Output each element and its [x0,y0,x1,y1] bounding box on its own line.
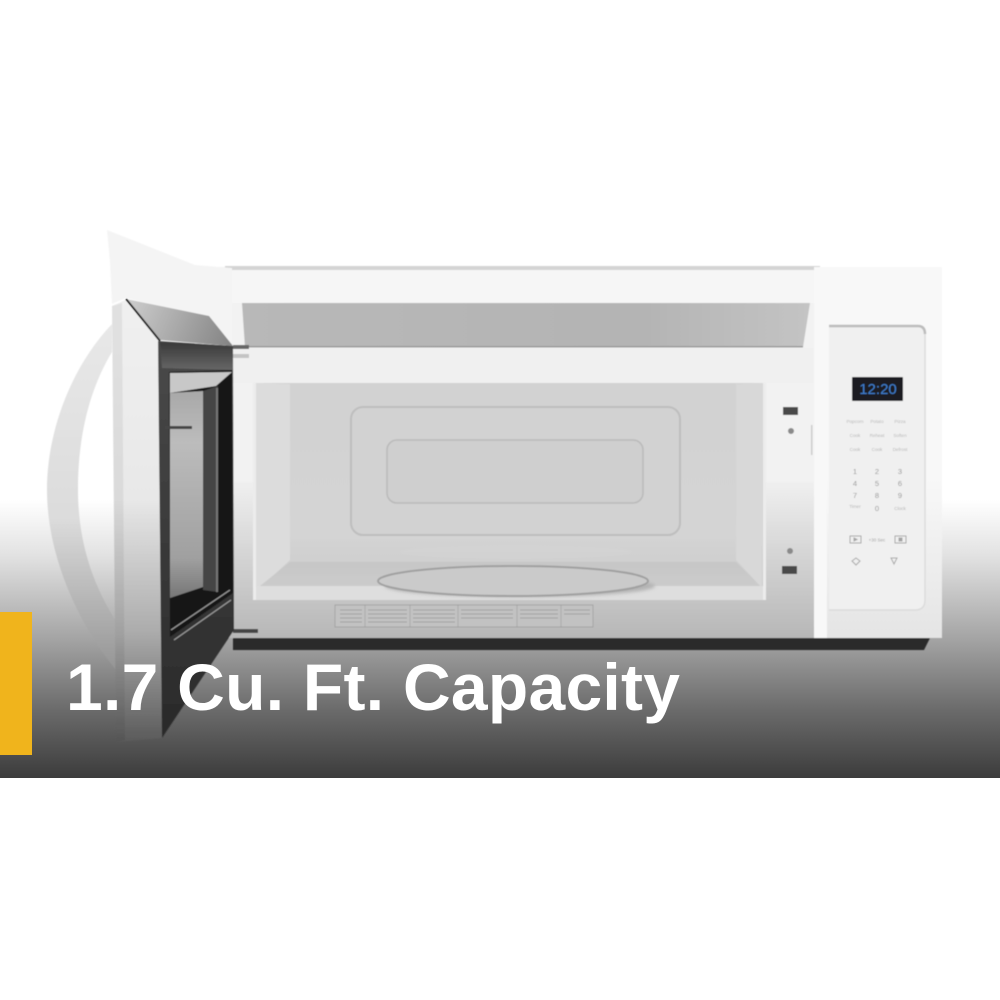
control panel housing [827,267,942,638]
number keys: 9 [898,491,902,500]
recess right and bottom edge [829,334,925,610]
door top face [126,299,233,346]
number keys: Clock [894,506,906,511]
icon: door handle [47,324,118,672]
number keys: 8 [875,491,879,500]
function keys: Cook [850,447,861,452]
upper vent recess [232,270,814,383]
door side edge [112,300,162,742]
body upper fill [195,267,827,482]
top-left hinge flap [107,230,232,345]
function keys: Cook [872,447,883,452]
number keys [849,467,906,513]
turntable reflection [400,545,632,559]
function keys: Reheat [870,433,885,438]
dark bottom edge [233,638,930,650]
divider strip [814,267,827,638]
microwave oven [47,230,942,742]
function keys: Popcorn [846,419,864,424]
function keys: Soften [893,433,907,438]
number keys: 0 [875,504,879,513]
number keys: 2 [875,467,879,476]
number keys: 5 [875,479,879,488]
number keys: 1 [853,467,857,476]
function keys [846,419,908,452]
number keys: 6 [898,479,902,488]
door inner frame [158,341,234,738]
number keys: Timer [849,504,861,509]
door latch slots [782,407,812,574]
function keys: Pizza [894,419,906,424]
digital display: 12:20 [859,381,897,398]
number keys: 4 [853,479,857,488]
door hinge plates [233,345,258,633]
start and cancel keys: +30 Sec [869,538,886,542]
recess top shadow edge [829,326,925,334]
back wall outer embossed panel [351,407,680,535]
cooking chart label [335,605,593,627]
door side shadow strip [112,303,125,742]
function keys: Cook [850,433,861,438]
top trim [225,266,820,270]
upper door reflection [160,342,233,370]
control panel recess [829,326,925,610]
door window [165,370,233,640]
start and cancel keys [850,536,906,565]
oven body [195,267,827,638]
background gradient band [0,500,1000,778]
turntable [378,566,655,597]
yellow accent bar [0,612,32,755]
digital display [852,377,903,401]
title: 1.7 Cu. Ft. Capacity [66,650,680,724]
function keys: Defrost [893,447,908,452]
back wall inner embossed panel [387,440,643,503]
number keys: 7 [853,491,857,500]
oven cavity [253,383,766,600]
number keys: 3 [898,467,902,476]
function keys: Potato [870,419,884,424]
